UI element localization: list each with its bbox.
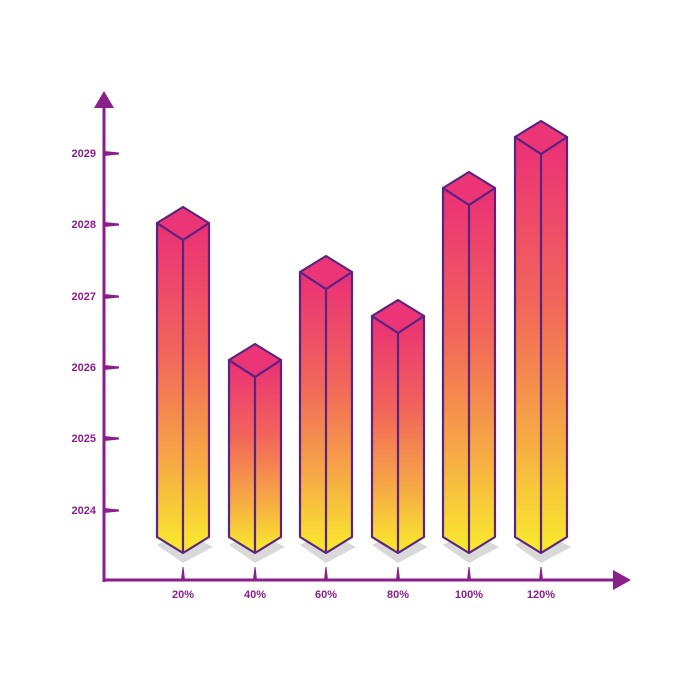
x labels: 60% xyxy=(315,589,337,601)
x labels: 40% xyxy=(244,589,266,601)
bar: 20% xyxy=(157,207,209,553)
x labels: 20% xyxy=(172,589,194,601)
y labels: 2025 xyxy=(72,433,96,445)
shadows xyxy=(157,531,571,563)
x labels: 80% xyxy=(387,589,409,601)
x labels: 100% xyxy=(455,589,483,601)
y labels xyxy=(72,148,97,517)
bar: 40% xyxy=(229,344,281,553)
x labels xyxy=(172,589,555,601)
y labels: 2026 xyxy=(72,362,96,374)
y axis xyxy=(94,91,119,582)
y labels: 2028 xyxy=(72,219,96,231)
bar: 120% xyxy=(515,121,567,553)
bar: 60% xyxy=(300,256,352,553)
bar: 80% xyxy=(372,300,424,553)
bar: 100% xyxy=(443,172,495,553)
y labels: 2024 xyxy=(72,505,97,517)
x axis xyxy=(102,567,631,590)
x labels: 120% xyxy=(527,589,555,601)
y labels: 2029 xyxy=(72,148,96,160)
y labels: 2027 xyxy=(72,291,96,303)
